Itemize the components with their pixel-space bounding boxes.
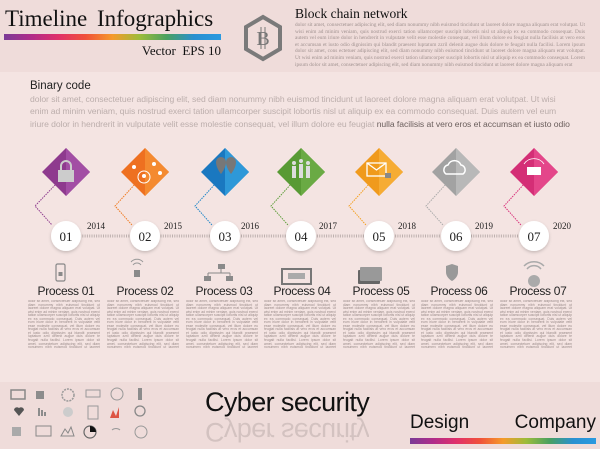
heading: binary code: Binary code [30, 80, 91, 92]
step 05: 05 [372, 229, 386, 244]
binary code paragraph: enim ad minim veniam, quis nostrud exerci tation ullamcorper suscipit lobortis nisl ut aliquip ex ea commodo consequat. Duis autem vel eum [30, 106, 556, 116]
step 06 [426, 148, 494, 251]
icon: bitcoin hexagon [244, 14, 282, 62]
icon grid [10, 388, 148, 439]
timeline [34, 148, 572, 287]
title: Timeline Infographics [5, 6, 213, 31]
step 01 [35, 148, 106, 251]
step 02: 02 [138, 229, 152, 244]
heading: block chain network: Block chain network [295, 6, 407, 21]
process 07: Process 07 [509, 284, 567, 298]
binary code paragraph [30, 94, 570, 129]
step 05: 2018 [398, 221, 416, 231]
step 01: 01 [60, 229, 72, 244]
step 07 [504, 148, 572, 251]
step 01: 2014 [87, 221, 106, 231]
step 07: 07 [528, 229, 541, 244]
top band [0, 0, 600, 72]
subtitle: Vector EPS 10 [142, 43, 221, 58]
process 05: Process 05 [352, 284, 410, 298]
step 06: 2019 [475, 221, 494, 231]
small grey icons row [56, 259, 544, 287]
step 06: 06 [450, 229, 463, 244]
step 04: 2017 [319, 221, 338, 231]
step 02 [115, 148, 182, 251]
binary code paragraph: iriure dolor in hendrerit in vulputate velit esse molestie consequat, vel illum dolore eu feugiat nulla facilisis at vero eros et accumsan et iusto odio [30, 119, 570, 129]
design company [410, 412, 596, 433]
process 06: Process 06 [430, 284, 488, 298]
step 07: 2020 [553, 221, 572, 231]
reflection: Cyber security [205, 417, 369, 447]
block chain text: dolor sit amet, consectetuer adipiscing elit, sed diam nonummy nibh euismod tincidunt ut laoreet dolore magna aliquam erat volutpat. Ut wisi enim ad minim veniam, quis nostrud exerci tation ullamcorper suscipit lobortis nisl ut aliquip ex ea commodo consequat. Duis autem vel eum iriure dolor in hendrerit in vulputate velit esse molestie consequat, vel illum dolore eu feugiat nulla facilisis at vero eros et accumsan et iusto odio dignissim qui blandit praesent luptatum zzril delenit augue duis dolore te feugait nulla facilisi. Lorem ipsum dolor sit amet, cons ectetuer adipiscing elit, sed diam nonummy nibh euismod tincidunt ut laoreet dolore magna aliquam erat volutpat. Ut wisi enim ad minim veniam, quis nostrud exerci tation ullamcorper suscipit lobortis nisl ut aliquip ex ea commodo consequat. Lorem ipsum dolor sit amet, consectetuer adipiscing elit, sed diam nonummy nibh euismod tincidunt ut laoreet dolore magna aliquam erat [295, 22, 585, 68]
step 03: 03 [218, 229, 232, 244]
heading: cyber security: Cyber security [205, 387, 369, 417]
binary code paragraph: dolor sit amet, consectetuer adipiscing elit, sed diam nonummy nibh euismod tincidunt ut laoreet dolore magna aliquam erat volutpat. Ut wisi [30, 94, 556, 104]
bottom gradient bar [410, 438, 596, 444]
design company: Company [515, 412, 596, 433]
dotted timeline line [80, 234, 520, 238]
process columns [28, 284, 572, 348]
step 02: 2015 [164, 221, 182, 231]
step 04 [271, 148, 338, 251]
process 02: Process 02 [116, 284, 174, 298]
step 04: 04 [294, 229, 308, 244]
process 03: Process 03 [195, 284, 253, 298]
step 03 [195, 148, 260, 251]
icon: bitcoin hexagon: B [256, 28, 270, 50]
title gradient bar [4, 34, 221, 40]
process 04: Process 04 [273, 284, 331, 298]
step 03: 2016 [241, 221, 260, 231]
step 05 [349, 148, 416, 251]
design company: Design [410, 412, 469, 433]
process 01: Process 01 [37, 284, 95, 298]
bottom band [0, 382, 600, 449]
